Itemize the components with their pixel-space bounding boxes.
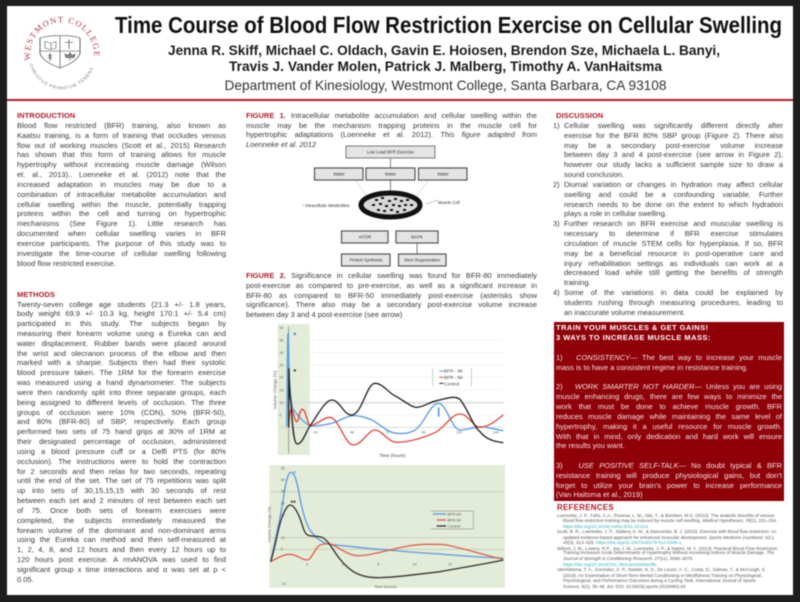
figure 1 caption: Loenneke et al. 2012 bbox=[246, 140, 316, 149]
introduction text: Blood flow restricted (BFR) training, also known as bbox=[17, 121, 226, 130]
methods text: marked with a sharpie. Subjects then had their systolic bbox=[17, 358, 226, 367]
boxes: water: Water bbox=[333, 172, 345, 176]
figure 1 caption: muscle may be the mechanism trapping proteins in the muscle cell for bbox=[246, 121, 537, 130]
label: metabolites: ↑ Intracellular Metabolites bbox=[302, 203, 349, 208]
asterisks bbox=[293, 330, 296, 376]
tip 2: 2) WORK SMARTER NOT HARDER— Unless you are using bbox=[556, 382, 782, 391]
methods text: between each set and 2 minutes of rest between each set bbox=[17, 496, 226, 505]
discussion item 1: may be a secondary post-exercise volume increase bbox=[564, 141, 783, 150]
axis labels: 30 bbox=[279, 351, 283, 355]
heading: references: REFERENCES bbox=[557, 503, 614, 512]
heading: methods: METHODS bbox=[17, 290, 55, 298]
introduction text: exercise participants. The purpose of this study was to bbox=[17, 239, 226, 248]
axis labels: 20 bbox=[279, 376, 283, 380]
series: control bbox=[289, 368, 503, 444]
tip 2: work that must be done to achieve muscle growth. BFR bbox=[556, 402, 782, 411]
methods text: water displacement. Rubber bands were placed around bbox=[17, 339, 226, 348]
boxes: water bbox=[314, 168, 467, 180]
introduction text: mechanisms (See Figure 1). Little research has bbox=[17, 219, 226, 228]
references list: updated evidence-based approach for enhanced muscular development. Sports Medicine (Auckland, NZ.), bbox=[563, 535, 775, 540]
figure 1 caption: FIGURE 1. Intracellular metabolite accumulation and cellular swelling within the bbox=[246, 111, 537, 120]
discussion item 4: students rushing through measuring procedures, leading to bbox=[564, 298, 783, 307]
discussion item 2 bbox=[552, 180, 784, 218]
figure 1 diagram bbox=[302, 144, 468, 268]
department line: Department of Kinesiology, Westmont College, Santa Barbara, CA 93108 bbox=[224, 77, 667, 93]
discussion item 1 bbox=[553, 121, 784, 179]
header divider bbox=[7, 98, 793, 100]
asterisks: * bbox=[293, 471, 296, 478]
methods text: their designated percentage of occlusion, administered bbox=[17, 437, 226, 446]
introduction text: proteins within the cell and turning on hypertrophic bbox=[17, 209, 226, 218]
logo: Westmont College seal: WESTMONT COLLEGE bbox=[24, 16, 100, 61]
tip 3: 3) USE POSITIVE SELF-TALK— No doubt typical & BFR bbox=[556, 461, 782, 470]
asterisks: * bbox=[293, 330, 296, 339]
axis labels: 72 bbox=[385, 431, 389, 435]
methods text: participated in this study. The subjects began by bbox=[17, 319, 226, 328]
discussion item 1: between day 3 and 4 post-exercise (see arrow in Figure 2), bbox=[564, 150, 783, 159]
series: BFR-50 bbox=[289, 409, 503, 445]
line chart: volume change over full time course bbox=[272, 324, 504, 458]
introduction text: flow out of working muscles (Scott et al., 2015) Research bbox=[17, 141, 226, 150]
introduction text: Kaatsu training, is a form of training that occludes venous bbox=[17, 131, 226, 140]
discussion item 2: swelling and could be a confounding variable. Further bbox=[564, 190, 783, 199]
discussion item 1: Cellular swelling was significantly different directly after bbox=[564, 121, 783, 130]
label: muscle cell: Muscle Cell bbox=[438, 200, 460, 205]
legend: BFR-80 bbox=[447, 511, 462, 516]
logo: Westmont College seal: CHRISTUS PRIMATUM TENENS bbox=[29, 63, 94, 90]
axis labels: Volume Change (%) bbox=[273, 370, 278, 409]
references list: (2019). An Examination of Short-Term Mental Conditioning or Mindfulness Training on Physiological, bbox=[563, 573, 762, 578]
discussion item 4: an inaccurate volume measurement. bbox=[564, 308, 685, 317]
references list: Psychological, and Performance Outcomes during a Cycling Task. International Journal of Sports bbox=[563, 578, 756, 583]
discussion item 1: sound conclusion. bbox=[564, 170, 624, 179]
references list: Training Increases Acute Determinants of Hypertrophy Without Increasing Indices of Muscle Damage. The bbox=[563, 550, 774, 555]
methods text: were then randomly split into three separate groups, each bbox=[17, 388, 226, 397]
tip 2: reduces muscle damage while maintaining the same level of bbox=[556, 412, 782, 421]
discussion item 2: research needs to be done on the extent to which hydration bbox=[564, 200, 783, 209]
discussion item 3: training. bbox=[564, 278, 591, 287]
tip 2: muscle enhancing drugs, there are few ways to minimize the bbox=[556, 392, 782, 401]
axis labels: 10 bbox=[279, 401, 283, 405]
figure 2 caption: significance). There also may be a secondary post-exercise volume increase bbox=[246, 300, 537, 309]
references list: Wilson, J. M., Lowery, R.P., Joy, J. M., Loenneke, J. P., & Naimo, M. A. (2013). Practical Blood Flow Restriction bbox=[557, 546, 777, 551]
series: BFR-80 bbox=[287, 333, 503, 434]
methods text bbox=[16, 300, 226, 584]
tip 1 bbox=[556, 353, 782, 372]
introduction text: increased adaptation in muscles may be due to a bbox=[17, 180, 226, 189]
series: control bbox=[271, 505, 503, 578]
tip 2: the results you want. bbox=[556, 441, 625, 450]
axis labels: 5 bbox=[281, 548, 283, 552]
callout heading bbox=[555, 323, 711, 342]
axis labels: 6 bbox=[342, 563, 344, 567]
figure 2 caption: post-exercise as compared to pre-exercise, as well as a significant increase in bbox=[246, 281, 537, 290]
axis labels: -10 bbox=[281, 582, 286, 586]
tip 3: resistance training will produce physiological gains, but don't bbox=[556, 471, 782, 480]
arrow: secondary volume increase bbox=[436, 407, 441, 417]
references list: VanHaitsma, T. A., Gonzalez, S. P., Swisler, N. S., De Leuze, A. C., Costa, D., Salinas, T., & McCough, S. bbox=[557, 567, 766, 572]
methods text: 1, 2, 4, 8, and 12 hours and then every 12 hours up to bbox=[17, 545, 226, 554]
methods text: up into sets of 30,15,15,15 with 30 seconds of rest bbox=[17, 486, 226, 495]
callout heading: 3 WAYS TO INCREASE MUSCLE MASS: bbox=[556, 333, 711, 342]
introduction text: investigate the time-course of cellular swelling following bbox=[17, 249, 226, 258]
tip 2 bbox=[555, 382, 782, 450]
axis labels: 15 bbox=[281, 513, 285, 517]
series: BFR-80 bbox=[271, 472, 503, 562]
axis labels: 15 bbox=[279, 388, 283, 392]
authors: Jenna R. Skiff, Michael C. Oldach, Gavin E. Hoiosen, Brendon Sze, Michaela L. Banyi, bbox=[168, 43, 720, 58]
methods text: was measured using a hand dynamometer. The subjects bbox=[17, 378, 226, 387]
discussion item 4 bbox=[552, 288, 784, 317]
references list: Journal of Strength & Conditioning Research, 27(11), 3068–3075. bbox=[563, 556, 694, 561]
axis labels: 120 bbox=[456, 431, 462, 435]
boxes: water: Water bbox=[385, 172, 397, 176]
methods text: performed two sets of 75 hand grips at 30% of 1RM at bbox=[17, 427, 226, 436]
axis labels: 10 bbox=[413, 563, 417, 567]
axis labels: 30 bbox=[281, 478, 285, 482]
heading: introduction: INTRODUCTION bbox=[17, 111, 75, 120]
references list: https://doi.org/10.1016/j.mehy.2011.10.014 bbox=[563, 524, 648, 529]
panel: introduction bbox=[16, 111, 226, 268]
methods text: completed, the subjects immediately measured the bbox=[17, 516, 226, 525]
lower boxes: mTOR bbox=[359, 234, 371, 240]
discussion item 3: necessary to determine if BFR exercise stimulates bbox=[564, 229, 783, 238]
figure 1 caption: hypertrophic adaptations (Loenneke et al. 2012). This figure adapted from bbox=[246, 130, 537, 139]
legend: Control bbox=[447, 523, 460, 528]
introduction text: et. al., 2013).. Loenneke et al. (2012) note that the bbox=[17, 170, 226, 179]
introduction text: hypertrophy without increasing muscle damage (Wilson bbox=[17, 160, 226, 169]
tip 3: (Van Haitsma et al., 2019) bbox=[556, 490, 643, 499]
references list: https://doi.org/10.1519/JSC.0b013e31828a1ffa bbox=[563, 562, 656, 567]
figure 2 caption bbox=[246, 271, 538, 320]
introduction text: blood flow restricted exercise. bbox=[17, 259, 116, 268]
discussion item 3: Further research on BFR exercise and muscular swelling is bbox=[564, 219, 783, 228]
boxes: water: Water bbox=[437, 172, 449, 176]
axis labels bbox=[266, 466, 452, 589]
methods text: of 75. Once both sets of forearm exercises were bbox=[17, 506, 226, 515]
callout heading: TRAIN YOUR MUSCLES & GET GAINS! bbox=[556, 323, 709, 332]
box: exercise bbox=[346, 146, 435, 158]
discussion item 2: Diurnal variation or changes in hydration may affect cellular bbox=[564, 180, 783, 189]
methods text: occlusion). The instructions were to hold the contraction bbox=[17, 457, 226, 466]
discussion item 1: 1) bbox=[553, 121, 560, 130]
methods text: the wrist and olecranon process of the elbow and then bbox=[17, 349, 226, 358]
discussion item 3: injury rehabilitation settings as individuals can work at a bbox=[564, 259, 783, 268]
introduction text: cellular swelling within the muscle, potentially trapping bbox=[17, 200, 226, 209]
axis labels: 96 bbox=[421, 431, 425, 435]
highlighted first-12-hours region bbox=[278, 324, 310, 455]
axis labels: 40 bbox=[279, 326, 283, 330]
legend: Control bbox=[444, 381, 459, 386]
discussion item 2: plays a role in cellular swelling. bbox=[564, 209, 667, 218]
figure 2 caption: BFR-80 as compared to BFR-50 immediately post-exercise (asterisks show bbox=[246, 291, 537, 300]
axis labels: 10 bbox=[281, 536, 285, 540]
axis labels: 25 bbox=[279, 363, 283, 367]
box: exercise: Low Load BFR Exercise bbox=[367, 150, 415, 154]
discussion item 1: exercise for the BFR 80% SBP group (Figure 2). There also bbox=[564, 131, 783, 140]
axis labels: Volume Change (%) bbox=[266, 506, 271, 542]
asterisks: * bbox=[293, 367, 296, 376]
discussion item 3: circulation of muscle STEM cells for hyperplasia. If so, BFR bbox=[564, 239, 783, 248]
methods text: 0.05. bbox=[17, 575, 34, 584]
series: BFR-50 bbox=[271, 544, 503, 562]
figure 2 caption: between day 3 and 4 post-exercise (see arrow) bbox=[246, 310, 402, 319]
tip 2: hypertrophy, making it a useful resource for muscle growth. bbox=[556, 422, 782, 431]
legend bbox=[431, 511, 473, 529]
asterisks: ** bbox=[291, 500, 296, 507]
methods text: and 80% (BFR-80) of SBP, respectively. Each group bbox=[17, 417, 226, 426]
axis labels: 35 bbox=[281, 466, 285, 470]
introduction text: has shown that this form of training allows for muscle bbox=[17, 150, 226, 159]
lower boxes: Protein Synthesis bbox=[350, 258, 382, 262]
references list: Science, 9(2), 35–46. doi: DOI: 10.5923/j.sports.20190902.03 bbox=[563, 584, 686, 589]
legend bbox=[433, 368, 471, 387]
axis labels: 48 bbox=[350, 431, 354, 435]
tip 3 bbox=[556, 461, 782, 499]
methods text: being assigned to different levels of occlusion. The three bbox=[17, 398, 226, 407]
logo: Westmont College seal bbox=[24, 16, 100, 90]
lower boxes: MAPK bbox=[411, 234, 423, 240]
tip 3: forget to utilize your brain's power to increase performance bbox=[556, 481, 782, 490]
methods text: 120 hours post exercise. A rmANOVA was used to find bbox=[17, 555, 226, 564]
axis labels: 144 bbox=[493, 431, 499, 435]
axis labels: 12 bbox=[448, 563, 452, 567]
cell with metabolites bbox=[361, 193, 420, 217]
legend: BFR-50 bbox=[447, 517, 462, 522]
tip 1: mass is to have a consistent regime in resistance training. bbox=[556, 363, 748, 372]
axis labels: 25 bbox=[281, 490, 285, 494]
axis labels bbox=[273, 326, 499, 458]
axis labels: 4 bbox=[306, 563, 308, 567]
methods text: using a blood pressure cuff or a Delfi PTS (for 80% bbox=[17, 447, 226, 456]
axis labels: Time (hours) bbox=[379, 453, 406, 458]
methods text: measuring their forearm volume using a Eureka can and bbox=[17, 329, 226, 338]
methods text: groups of occlusion were 10% (CON), 50% (BFR-50), bbox=[17, 408, 226, 417]
green plot area bbox=[269, 465, 505, 588]
methods text: body weight 69.9 +/- 10.3 kg, height 170.1 +/- 5.4 cm) bbox=[17, 309, 226, 318]
references list: 45(3), 313–325. https://doi.org/10.1007/s40279-014-0288-1 bbox=[563, 540, 681, 545]
discussion item 3 bbox=[552, 219, 784, 288]
methods text: Twenty-seven college age students (21.3 +/- 1.8 years, bbox=[17, 300, 226, 308]
authors bbox=[168, 43, 720, 75]
discussion item 3: decreased load while still getting the benefits of strength bbox=[564, 268, 783, 277]
tip 1: 1) CONSISTENCY— The best way to increase your muscle bbox=[556, 353, 782, 362]
legend: BFR - 80 bbox=[444, 369, 463, 374]
figure 2 caption: FIGURE 2. Significance in cellular swelling was found for BFR-80 immediately bbox=[246, 271, 537, 280]
heading: discussion: DISCUSSION bbox=[556, 111, 603, 120]
discussion item 1: however our study lacks a sufficient sample size to draw a bbox=[564, 160, 783, 169]
panel: methods bbox=[16, 290, 226, 584]
asterisks bbox=[291, 471, 296, 507]
discussion item 4: Some of the variations in data could be explained by bbox=[564, 288, 783, 297]
methods text: until the end of the set. The set of 75 repetitions was split bbox=[17, 476, 226, 485]
discussion item 3: may be a beneficial resource in post-operative care and bbox=[564, 249, 783, 258]
methods text: using the Eureka can method and then self-measured at bbox=[17, 535, 226, 544]
discussion item 3: 3) bbox=[553, 219, 560, 228]
references list: blood flow restriction training may be induced by muscle cell swelling. Medical Hypotheses, 78(1), 151–154. bbox=[563, 518, 777, 523]
references list: Loenneke, J. P., Fahs, C.A., Rossow, L. M., Abe, T., & Bemben, M.G. (2012). The anabolic benefits of venous bbox=[557, 513, 774, 518]
line chart: first hours zoomed bbox=[266, 464, 506, 590]
tip 2: With that in mind, only dedication and hard work will ensure bbox=[556, 432, 782, 440]
references list: Scott, B. R., Loenneke, J. P., Slattery, K. M., & Dascombe, B. J. (2015). Exercise with blood flow restriction: An bbox=[557, 529, 776, 534]
callout: train your muscles bbox=[554, 322, 784, 501]
authors: Travis J. Vander Molen, Patrick J. Malberg, Timothy A. VanHaitsma bbox=[229, 59, 662, 74]
figure 1 caption bbox=[246, 111, 538, 149]
lower boxes: Stem Regeneration bbox=[404, 258, 441, 262]
legend: BFR - 50 bbox=[444, 375, 463, 380]
axis labels: 24 bbox=[313, 431, 317, 435]
panel: discussion bbox=[552, 111, 784, 317]
discussion item 2: 2) bbox=[553, 180, 560, 189]
axis labels: 5 bbox=[279, 413, 281, 417]
discussion item 4: 4) bbox=[553, 288, 560, 297]
axis labels: 35 bbox=[279, 338, 283, 342]
methods text: forearm volume of the dominant and non-dominant arms bbox=[17, 526, 226, 535]
methods text: for 2 seconds and then relax for two seconds, repeating bbox=[17, 467, 226, 476]
introduction text: documented when cellular swelling varies in BFR bbox=[17, 229, 226, 238]
lower boxes bbox=[342, 231, 446, 266]
axis labels: 20 bbox=[281, 501, 285, 505]
methods text: significant group x time interactions and α was set at p < bbox=[17, 565, 226, 574]
axis labels: 8 bbox=[377, 563, 379, 567]
introduction text: combination of intracellular metabolite accumulation and bbox=[17, 190, 226, 199]
axis labels: Time (hours) bbox=[374, 584, 397, 589]
methods text: blood pressure taken. The 1RM for the forearm exercise bbox=[17, 368, 226, 377]
introduction text bbox=[16, 121, 226, 268]
